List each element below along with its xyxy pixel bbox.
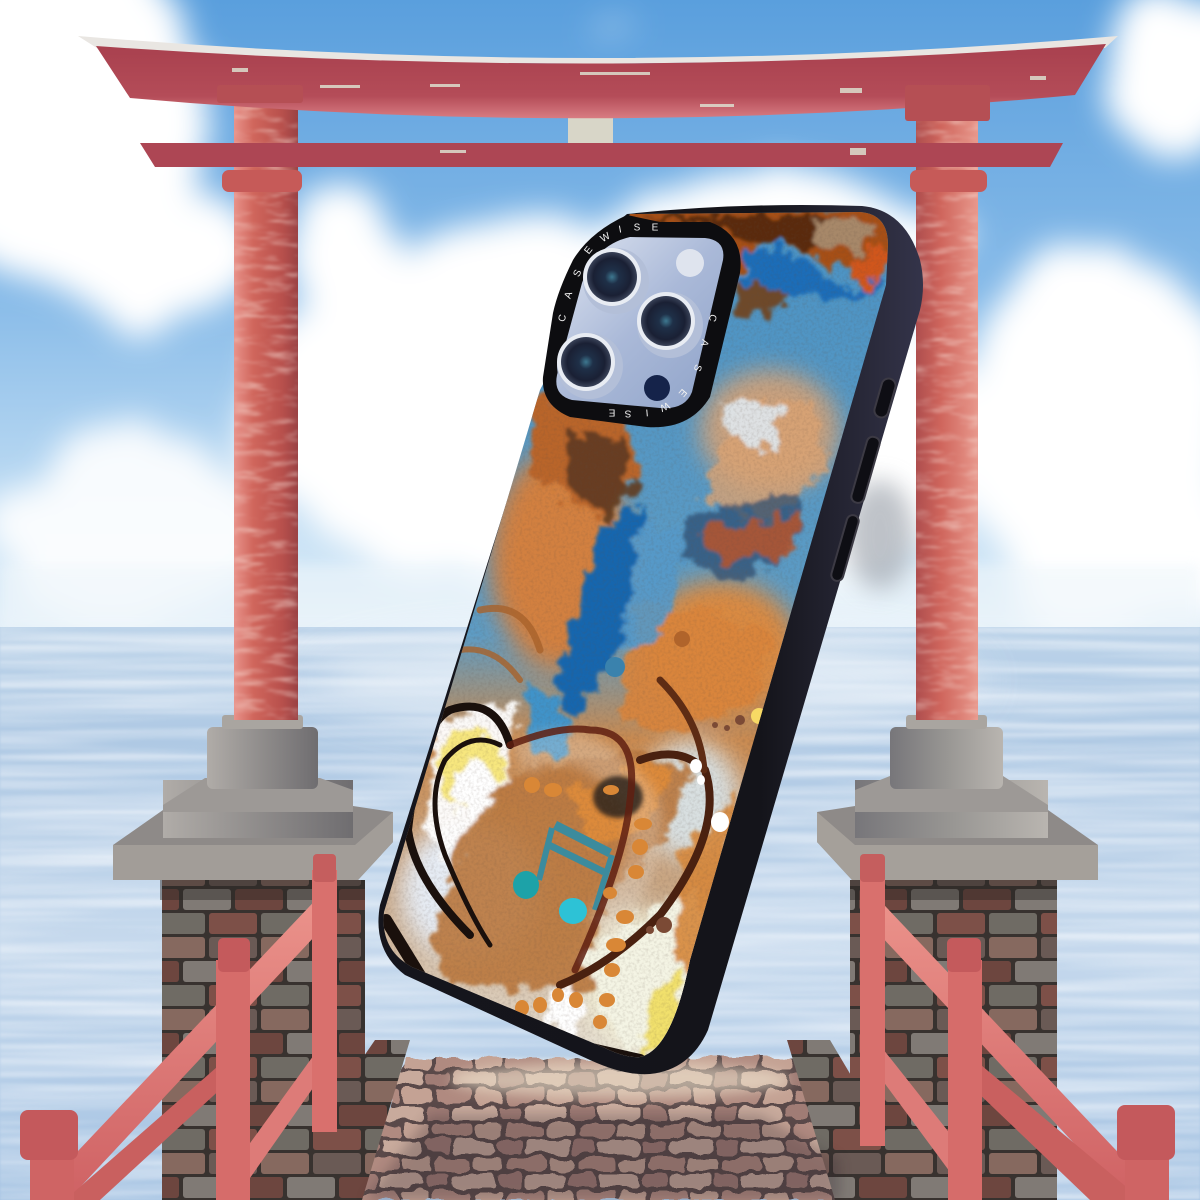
horizon haze xyxy=(0,565,1200,630)
right stone base xyxy=(817,715,1098,1200)
left stone base xyxy=(113,715,393,1200)
yellow spot xyxy=(751,708,763,724)
brand text: CASEWISE: S xyxy=(572,268,584,279)
cloud shadow beside phone xyxy=(846,480,914,590)
camera ring xyxy=(543,215,741,427)
brand text: CASEWISE: A xyxy=(698,338,710,348)
lens: bottom xyxy=(557,333,623,399)
brand text: CASEWISE: E xyxy=(608,406,615,418)
blue spot xyxy=(605,657,625,677)
clouds xyxy=(0,0,1200,630)
brand text: CASEWISE: S xyxy=(624,408,631,418)
brand text: CASEWISE: I xyxy=(645,406,649,418)
brand text: CASEWISE: W xyxy=(599,230,613,245)
torii: right pillar xyxy=(910,100,987,720)
brand text: CASEWISE: E xyxy=(676,386,689,399)
paint splatter dots xyxy=(515,777,652,1029)
torii: lower beam xyxy=(140,143,1063,167)
lower artwork washes xyxy=(425,705,740,1055)
camera plate xyxy=(556,237,723,408)
torii: pillar caps xyxy=(217,85,990,121)
brand text: CASEWISE: C xyxy=(557,314,569,323)
torii: left pillar xyxy=(222,100,302,720)
paint grain xyxy=(370,200,900,1070)
torii: centre strut xyxy=(568,104,613,144)
sea xyxy=(0,627,1200,1200)
brand text: CASEWISE: E xyxy=(582,244,595,257)
heart outlines xyxy=(386,608,710,1060)
music note xyxy=(513,825,612,924)
left railing xyxy=(20,854,337,1200)
lens: right xyxy=(637,292,703,358)
side buttons xyxy=(830,377,897,582)
flash xyxy=(676,249,704,277)
lens: top xyxy=(583,248,649,314)
brand text: CASEWISE: S xyxy=(691,363,703,373)
background: sky xyxy=(0,0,1200,640)
brand text: CASEWISE: A xyxy=(563,290,575,300)
brand text: CASEWISE xyxy=(557,222,718,418)
right railing xyxy=(860,854,1175,1200)
brand text: CASEWISE: E xyxy=(652,222,659,234)
case body xyxy=(378,205,923,1074)
back artwork xyxy=(370,200,900,1070)
brand text: CASEWISE: S xyxy=(634,222,641,234)
sensor xyxy=(644,375,670,401)
orange spot xyxy=(674,631,690,647)
torii: top beam xyxy=(78,36,1118,155)
brand text: CASEWISE: W xyxy=(657,399,671,413)
soft paint washes xyxy=(400,370,840,1050)
walkway xyxy=(265,1040,925,1200)
phone case xyxy=(370,200,923,1074)
brand text: CASEWISE: C xyxy=(706,313,718,323)
brand text: CASEWISE: I xyxy=(618,224,622,236)
